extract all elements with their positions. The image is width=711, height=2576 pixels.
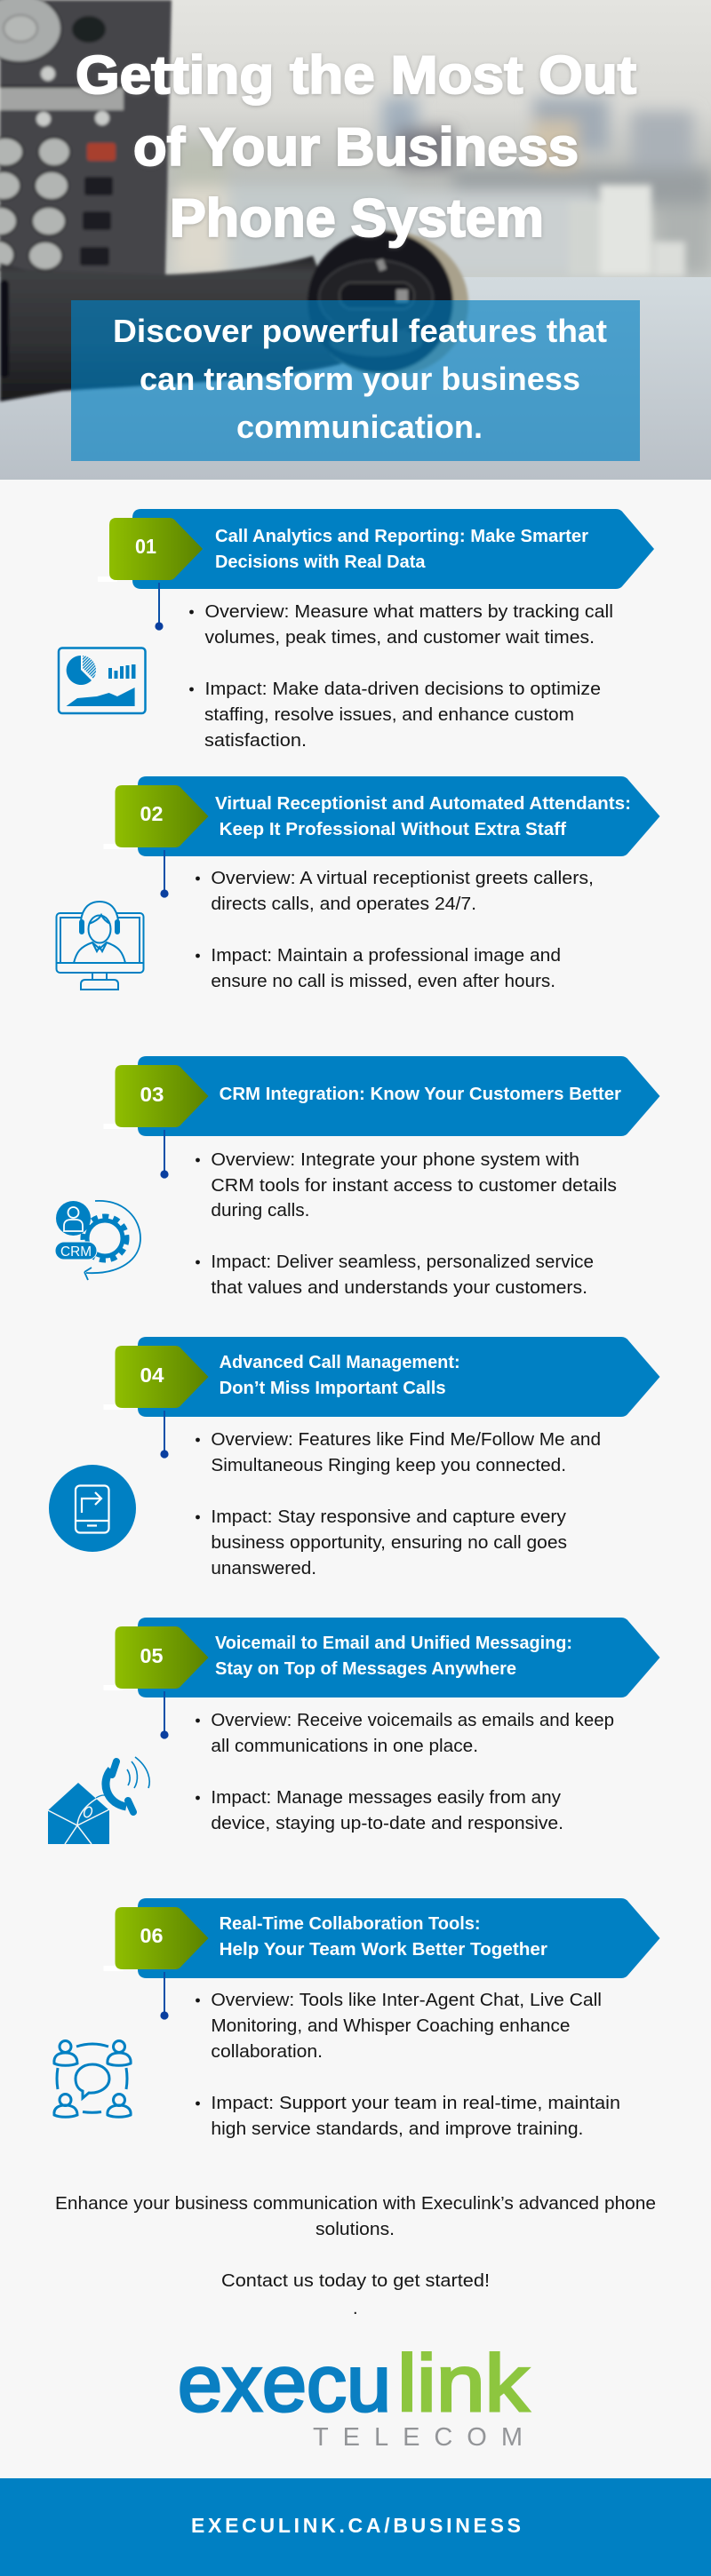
section 1: call analytics xyxy=(59,509,654,751)
banner 4 xyxy=(138,1337,659,1417)
heading 4 xyxy=(220,1353,460,1398)
connector 5 xyxy=(160,1691,169,1739)
bullets 6 xyxy=(196,1991,620,2139)
bullets 1 xyxy=(189,602,613,751)
icon: phone call forwarding xyxy=(49,1465,136,1552)
hero title: Getting the Most Out xyxy=(76,45,636,105)
icon: CRM gear and customer: CRM xyxy=(60,1244,92,1260)
connector 2 xyxy=(160,850,169,898)
bullets 6: Overview: Tools like Inter-Agent Chat, Live Call xyxy=(211,1991,602,2010)
section 4: advanced call management xyxy=(49,1337,659,1578)
bullets 2: directs calls, and operates 24/7. xyxy=(211,894,476,914)
bullets 1: volumes, peak times, and customer wait times. xyxy=(204,628,595,648)
section 6: collaboration tools xyxy=(54,1898,660,2139)
hero title xyxy=(76,45,636,248)
bullets 1: satisfaction. xyxy=(204,731,307,751)
heading 5: Stay on Top of Messages Anywhere xyxy=(215,1659,516,1679)
bullets 4: business opportunity, ensuring no call goes xyxy=(211,1533,567,1553)
heading 2: Virtual Receptionist and Automated Attendants: xyxy=(215,794,631,814)
bullets 6: high service standards, and improve training. xyxy=(211,2119,583,2139)
heading 5: Voicemail to Email and Unified Messaging: xyxy=(215,1634,572,1653)
bullets 5: Overview: Receive voicemails as emails and keep xyxy=(211,1711,614,1730)
hero title: Phone System xyxy=(170,188,544,248)
hero subtitle box: can transform your business xyxy=(140,361,580,397)
phone base xyxy=(0,0,468,402)
logo: Execulink Telecom xyxy=(178,2340,530,2452)
bullets 4: Impact: Stay responsive and capture every xyxy=(211,1507,566,1527)
closing message: . xyxy=(353,2299,358,2318)
number badge 02 xyxy=(103,785,208,849)
heading 1: Call Analytics and Reporting: Make Smarter xyxy=(215,527,588,546)
heading 1 xyxy=(215,527,588,572)
banner 2 xyxy=(138,776,659,856)
heading 2: Keep It Professional Without Extra Staff xyxy=(220,820,566,839)
number badge 03 xyxy=(103,1065,208,1129)
heading 5 xyxy=(215,1634,572,1679)
heading 3: CRM Integration: Know Your Customers Better xyxy=(220,1085,621,1104)
connector 4 xyxy=(160,1411,169,1459)
number badge 01: 01 xyxy=(135,535,156,558)
footer bar xyxy=(0,2478,711,2576)
hero subtitle box: communication. xyxy=(236,409,483,445)
bullets 4 xyxy=(196,1430,601,1578)
icon: envelope and telephone handset xyxy=(48,1757,149,1844)
bullets 1: Impact: Make data-driven decisions to optimize xyxy=(204,680,601,699)
number badge 05: 05 xyxy=(140,1644,164,1667)
number badge 05 xyxy=(103,1626,208,1690)
icon: team chat circle xyxy=(54,2041,131,2117)
bullets 2: Overview: A virtual receptionist greets callers, xyxy=(211,869,594,888)
footer bar: EXECULINK.CA/BUSINESS xyxy=(191,2514,521,2537)
heading 1: Decisions with Real Data xyxy=(215,553,426,572)
connector 1 xyxy=(155,583,164,631)
logo: Execulink Telecom: TELECOM xyxy=(313,2423,523,2452)
bullets 5: Impact: Manage messages easily from any xyxy=(211,1788,561,1808)
bullets 1: staffing, resolve issues, and enhance custom xyxy=(204,705,574,725)
bullets 3: CRM tools for instant access to customer details xyxy=(211,1176,617,1196)
hero photo: desk phone with blurred city skyline xyxy=(0,0,711,480)
bullets 3: Impact: Deliver seamless, personalized service xyxy=(211,1252,594,1272)
icon: CRM gear and customer xyxy=(55,1201,140,1280)
bullets 5: all communications in one place. xyxy=(211,1737,478,1756)
banner 6 xyxy=(138,1898,659,1978)
logo: Execulink Telecom: link xyxy=(397,2340,530,2429)
number badge 06: 06 xyxy=(140,1924,164,1947)
heading 2 xyxy=(215,794,631,839)
hero subtitle box xyxy=(71,300,640,461)
number badge 03: 03 xyxy=(140,1083,164,1106)
bullets 2: Impact: Maintain a professional image and xyxy=(211,946,561,966)
bullets 6: Monitoring, and Whisper Coaching enhance xyxy=(211,2016,570,2036)
section 5: voicemail to email xyxy=(48,1618,659,1844)
closing message xyxy=(55,2194,656,2318)
bullets 2 xyxy=(196,869,594,991)
number badge 02: 02 xyxy=(140,802,164,825)
hero subtitle box: Discover powerful features that xyxy=(113,313,607,349)
section 2: virtual receptionist xyxy=(57,776,659,991)
banner 5 xyxy=(138,1618,659,1697)
heading 4: Don’t Miss Important Calls xyxy=(220,1379,446,1398)
number badge 04: 04 xyxy=(140,1364,164,1387)
heading 6 xyxy=(220,1914,547,1960)
bullets 4: Overview: Features like Find Me/Follow Me and xyxy=(211,1430,601,1450)
heading 6: Help Your Team Work Better Together xyxy=(220,1940,547,1960)
banner 3 xyxy=(138,1056,659,1136)
icon: analytics dashboard xyxy=(59,648,146,713)
logo: Execulink Telecom: execu xyxy=(178,2340,391,2429)
bullets 2: ensure no call is missed, even after hours. xyxy=(211,972,555,991)
bullets 5: device, staying up-to-date and responsive. xyxy=(211,1814,563,1833)
bullets 3: Overview: Integrate your phone system with xyxy=(211,1150,579,1170)
handset xyxy=(0,256,356,402)
bullets 4: Simultaneous Ringing keep you connected. xyxy=(211,1456,566,1475)
bullets 1: Overview: Measure what matters by tracking call xyxy=(204,602,613,622)
closing message: solutions. xyxy=(316,2220,395,2239)
bullets 6: Impact: Support your team in real-time, maintain xyxy=(211,2094,620,2113)
heading 6: Real-Time Collaboration Tools: xyxy=(220,1914,481,1934)
section 3: CRM integration xyxy=(55,1056,659,1298)
bullets 4: unanswered. xyxy=(211,1559,316,1578)
connector 3 xyxy=(160,1130,169,1179)
connector 6 xyxy=(160,1972,169,2020)
icon: receptionist on monitor xyxy=(57,902,144,990)
hero title: of Your Business xyxy=(133,117,579,177)
number badge 04 xyxy=(103,1346,208,1410)
banner 1 xyxy=(132,509,654,589)
closing message: Contact us today to get started! xyxy=(221,2271,490,2291)
bullets 3 xyxy=(196,1150,617,1298)
number badge 06 xyxy=(103,1907,208,1971)
bullets 5 xyxy=(196,1711,614,1833)
closing message: Enhance your business communication with Execulink’s advanced phone xyxy=(55,2194,656,2214)
bullets 3: during calls. xyxy=(211,1201,309,1220)
heading 4: Advanced Call Management: xyxy=(220,1353,460,1372)
bullets 3: that values and understands your customers. xyxy=(211,1278,587,1298)
number badge 01 xyxy=(98,518,203,582)
bullets 6: collaboration. xyxy=(211,2042,323,2062)
